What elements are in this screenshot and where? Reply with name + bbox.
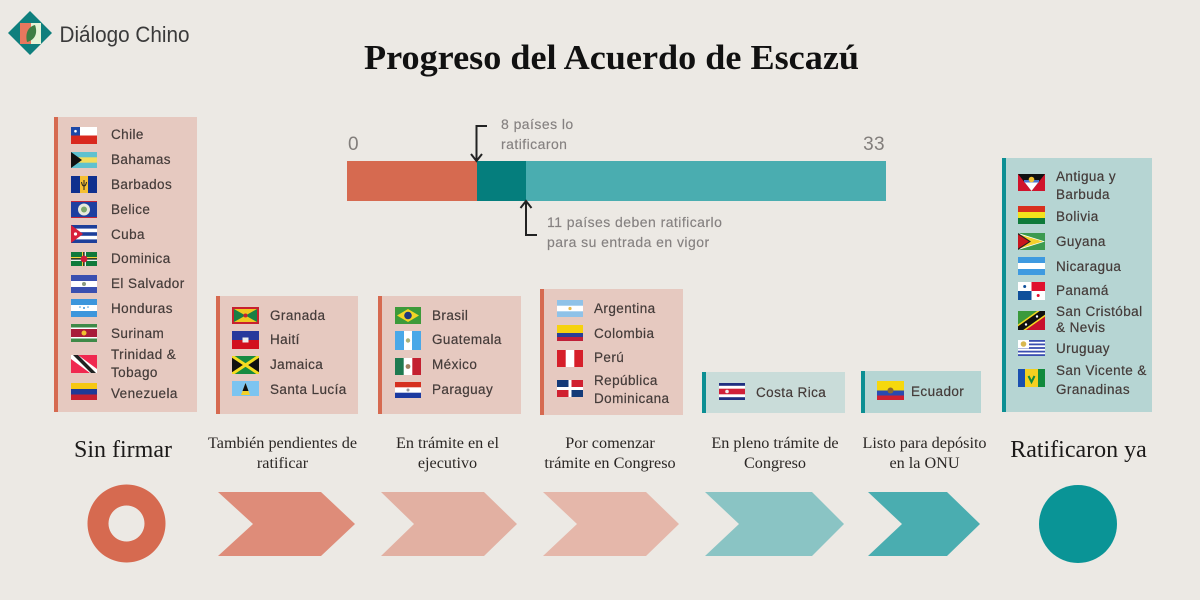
heading: por comenzar: Por comenzar [565, 434, 655, 452]
callout: 11 countries: 11 países deben ratificarlo [547, 214, 722, 230]
flag: México [395, 358, 421, 375]
heading: pleno trámite: En pleno trámite de [711, 434, 839, 452]
labels: sin firmar countries: Surinam [111, 326, 164, 341]
labels: sin firmar countries: Honduras [111, 301, 173, 316]
labels: sin firmar countries: Bahamas [111, 152, 171, 167]
flag: Nicaragua [1018, 257, 1045, 275]
labels: ratificaron ya countries: & Nevis [1056, 320, 1105, 335]
arrow: 11 needed [520, 201, 537, 235]
labels: sin firmar countries: Barbados [111, 177, 172, 192]
progress bar chart [347, 134, 886, 201]
labels: por comenzar countries: República [594, 373, 658, 388]
labels: trámite ejecutivo countries: México [432, 357, 477, 372]
flag: Colombia [557, 325, 583, 341]
arrow: chevron 2 [381, 492, 517, 556]
panel: también pendientes [216, 296, 358, 414]
heading: por comenzar: trámite en Congreso [544, 454, 676, 472]
labels: ratificaron ya countries: Guyana [1056, 234, 1106, 249]
labels: también pendientes countries: Santa Lucía [270, 382, 347, 397]
labels: ratificaron ya countries: San Vicente & [1056, 363, 1147, 378]
labels: por comenzar countries: Perú [594, 350, 624, 365]
flag: Honduras [71, 299, 97, 317]
flag: Brasil [395, 307, 421, 324]
flag: Surinam [71, 324, 97, 342]
flag: República Dominicana [557, 380, 583, 397]
flag: Argentina [557, 300, 583, 317]
flag: Cuba [71, 225, 97, 243]
heading: sin firmar: Sin firmar [74, 437, 172, 463]
flag: Barbados [71, 176, 97, 193]
flag: Venezuela [71, 383, 97, 400]
flag: Bahamas [71, 152, 97, 168]
labels: ratificaron ya countries: Granadinas [1056, 382, 1130, 397]
labels: trámite ejecutivo countries: Guatemala [432, 332, 502, 347]
labels: por comenzar countries: Argentina [594, 301, 656, 316]
flag: Guyana [1018, 233, 1045, 250]
heading: listo para depósito: Listo para depósito [862, 434, 987, 452]
labels: sin firmar countries: Cuba [111, 227, 145, 242]
flag: Panamá [1018, 282, 1045, 300]
labels: por comenzar countries: Dominicana [594, 391, 670, 406]
labels: ratificaron ya countries: Antigua y [1056, 169, 1116, 184]
heading: en trámite ejecutivo: ejecutivo [418, 454, 477, 472]
flag: Perú [557, 350, 583, 367]
heading: también pendientes: ratificar [257, 454, 309, 472]
labels: también pendientes countries: Haití [270, 332, 300, 347]
logo: Diálogo Chino [8, 11, 190, 55]
panel: listo para depósito [861, 371, 981, 413]
flag: San Cristóbal y Nevis [1018, 311, 1045, 330]
heading: también pendientes: También pendientes de [208, 434, 357, 452]
progress bar chart: 33 [863, 134, 885, 155]
progress bar chart: 0 [348, 134, 359, 155]
flag: Guatemala [395, 331, 421, 350]
labels: ratificaron ya countries: Uruguay [1056, 341, 1110, 356]
labels: también pendientes countries: Jamaica [270, 357, 323, 372]
flag: Chile [71, 127, 97, 144]
heading: ratificaron ya: Ratificaron ya [1010, 437, 1147, 463]
labels: ratificaron ya countries: Panamá [1056, 283, 1109, 298]
arrow: chevron 4 [705, 492, 844, 556]
flag: El Salvador [71, 275, 97, 293]
panel: por comenzar [540, 289, 683, 415]
callout: 8 countries: 8 países lo [501, 116, 574, 132]
label: Costa Rica: Costa Rica [756, 385, 826, 400]
labels: por comenzar countries: Colombia [594, 326, 654, 341]
labels: trámite ejecutivo countries: Paraguay [432, 382, 493, 397]
icon: ring [88, 484, 166, 562]
labels: también pendientes countries: Granada [270, 308, 325, 323]
flag: Trinidad y Tobago [71, 355, 97, 373]
labels: ratificaron ya countries: Barbuda [1056, 187, 1110, 202]
labels: sin firmar countries: Venezuela [111, 386, 178, 401]
arrow: chevron 3 [543, 492, 679, 556]
panel: trámite ejecutivo [378, 296, 521, 414]
title: Progreso del Acuerdo de Escazú [364, 38, 859, 77]
flag: Jamaica [232, 356, 259, 374]
flag: Belice [71, 201, 97, 218]
flag: San Vicente y Granadinas [1018, 369, 1045, 387]
labels: ratificaron ya countries: Bolivia [1056, 209, 1099, 224]
labels: ratificaron ya countries: Nicaragua [1056, 259, 1121, 274]
icon: solid circle [1039, 485, 1117, 563]
label: Ecuador: Ecuador [911, 384, 964, 399]
flag: Antigua y Barbuda [1018, 174, 1045, 191]
flag: Uruguay [1018, 340, 1045, 356]
labels: sin firmar countries: Chile [111, 127, 144, 142]
flag: Santa Lucía [232, 381, 259, 396]
flag: Ecuador [877, 381, 904, 400]
flag: Haití [232, 331, 259, 349]
arrow: 8 ratified [471, 126, 487, 161]
heading: listo para depósito: en la ONU [889, 454, 960, 472]
labels: sin firmar countries: Dominica [111, 251, 171, 266]
flag: Bolivia [1018, 206, 1045, 224]
labels: sin firmar countries: Belice [111, 202, 150, 217]
panel: sin firmar [54, 117, 197, 412]
labels: sin firmar countries: Trinidad & [111, 347, 176, 362]
flag: Costa Rica [719, 383, 745, 400]
arrow: chevron 5 [868, 492, 980, 556]
logo: Diálogo Chino: Diálogo Chino [60, 22, 190, 47]
flag: Dominica [71, 252, 97, 266]
flag: Granada [232, 307, 259, 324]
callout: 8 countries: ratificaron [501, 136, 567, 152]
arrow: chevron 1 [218, 492, 355, 556]
panel: pleno trámite [702, 372, 845, 413]
labels: ratificaron ya countries: San Cristóbal [1056, 304, 1142, 319]
heading: en trámite ejecutivo: En trámite en el [396, 434, 499, 452]
labels: sin firmar countries: Tobago [111, 365, 158, 380]
heading: pleno trámite: Congreso [744, 454, 806, 472]
labels: trámite ejecutivo countries: Brasil [432, 308, 468, 323]
panel: ratificaron ya [1002, 158, 1152, 412]
labels: sin firmar countries: El Salvador [111, 276, 185, 291]
flag: Paraguay [395, 382, 421, 398]
callout: 11 countries: para su entrada en vigor [547, 234, 710, 250]
